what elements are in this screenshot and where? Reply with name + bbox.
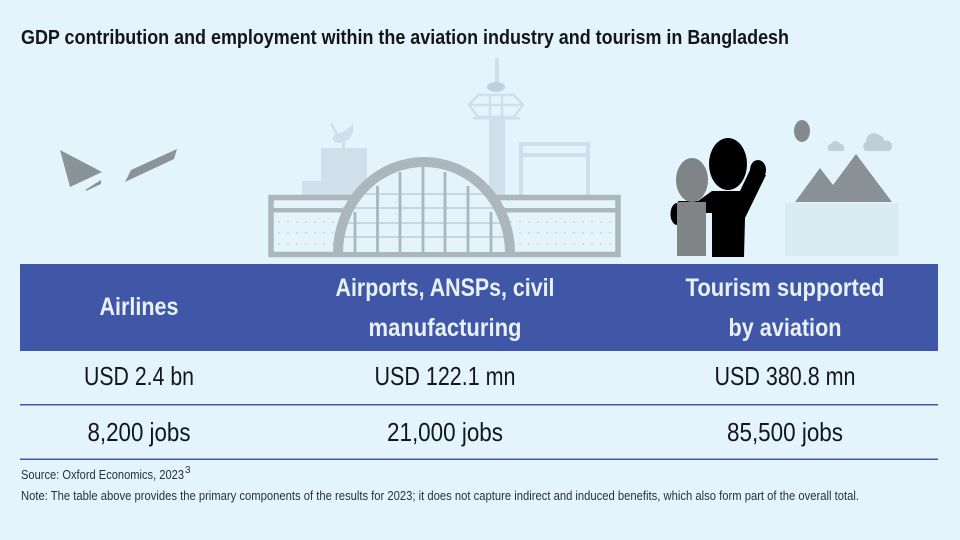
satellite building xyxy=(302,123,367,195)
row: jobs values: 85,500 jobs xyxy=(727,417,843,447)
header: airports xyxy=(336,274,554,342)
row: jobs values: 8,200 jobs xyxy=(88,417,190,447)
control tower xyxy=(469,58,523,196)
row: jobs values: 21,000 jobs xyxy=(387,417,503,447)
person: dark figure waving xyxy=(670,138,766,257)
rear hangar frame xyxy=(521,144,588,195)
clouds xyxy=(828,133,892,151)
row: GDP values: USD 380.8 mn xyxy=(714,361,856,391)
table header band xyxy=(20,264,938,351)
row: GDP values xyxy=(84,361,856,391)
icon: airport terminal xyxy=(270,58,620,254)
row: GDP values: USD 2.4 bn xyxy=(84,361,194,391)
header: airports: Airports, ANSPs, civil xyxy=(336,274,554,302)
header: tourism xyxy=(686,274,884,342)
person: grey figure xyxy=(676,158,708,256)
header: tourism: by aviation xyxy=(728,314,842,342)
sun xyxy=(794,120,810,142)
mountains xyxy=(795,154,892,202)
row: GDP values: USD 122.1 mn xyxy=(374,361,516,391)
water block xyxy=(785,203,898,256)
title: GDP contribution and employment within the aviation industry and tourism in Bangladesh xyxy=(21,27,789,49)
row: jobs values xyxy=(88,417,843,447)
icon: airplane xyxy=(60,149,177,190)
terminal frame xyxy=(270,198,620,254)
header: airlines: Airlines xyxy=(100,293,178,321)
source line: 3 xyxy=(185,465,191,476)
arch window xyxy=(338,162,510,253)
icon: tourists and landscape xyxy=(670,120,898,257)
header: airports: manufacturing xyxy=(368,314,522,342)
note: Note: The table above provides the primary components of the results for 2023; it does not capture indirect and induced benefits, which also form part of the overall total. xyxy=(21,489,859,503)
header: tourism: Tourism supported xyxy=(686,274,884,302)
source line: Source: Oxford Economics, 2023 xyxy=(21,467,184,482)
